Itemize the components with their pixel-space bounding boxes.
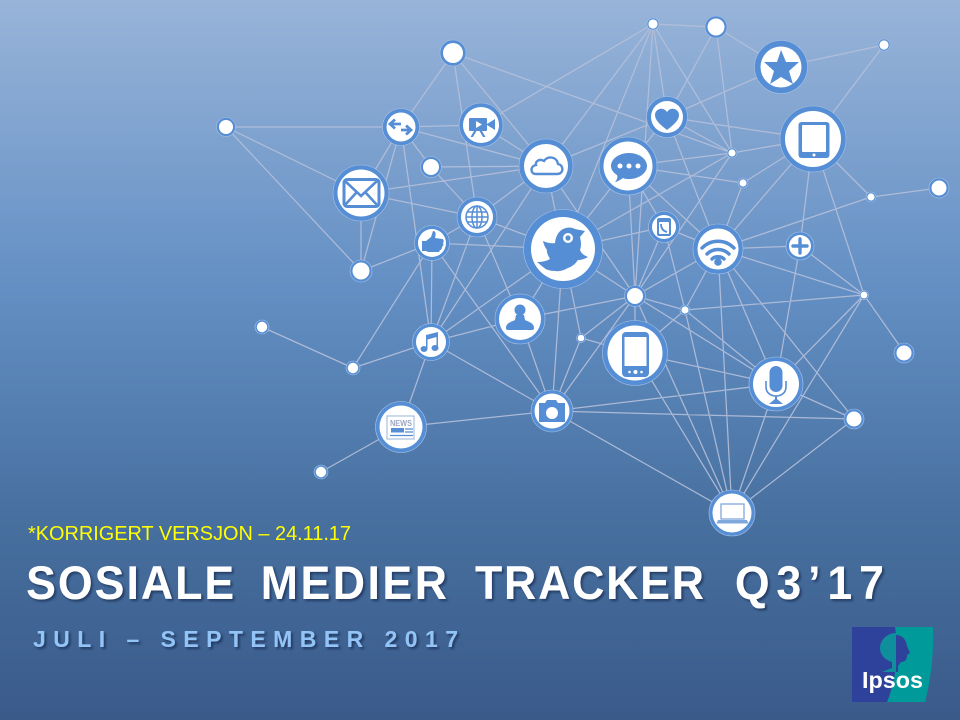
- small node: below arrows: [420, 156, 442, 178]
- icon: smartphone: [602, 320, 668, 386]
- small node: top: [440, 40, 466, 66]
- small node: top centre: [647, 18, 659, 30]
- icon: phone book: [648, 212, 680, 242]
- small node: junction right: [860, 290, 868, 300]
- icon: wifi: [693, 224, 743, 274]
- title: [26, 557, 884, 609]
- icon: cloud: [519, 139, 573, 193]
- icon: microphone: [749, 357, 803, 411]
- icon: thumbs up: [414, 226, 450, 260]
- icon: music note: [412, 324, 450, 360]
- small node: junction right: [866, 192, 876, 202]
- small node: junction: [727, 148, 737, 158]
- small node: centre: [576, 334, 586, 342]
- small node: hub: [624, 286, 646, 306]
- small node: left lower: [346, 361, 360, 375]
- icon: speech bubble: [599, 137, 657, 195]
- icon: plus: [786, 232, 814, 260]
- title: Q3’17: [735, 557, 884, 609]
- icon: laptop: [709, 490, 755, 536]
- small node: far left: [216, 118, 236, 136]
- icon: video camera: [459, 103, 503, 147]
- title: TRACKER: [475, 557, 704, 609]
- network connections: [226, 24, 939, 513]
- icon: newspaper: [376, 402, 426, 452]
- small node: top right: [705, 16, 727, 38]
- icon: globe: [457, 197, 497, 237]
- icon: heart: [646, 96, 688, 138]
- small node: below envelope: [350, 260, 372, 282]
- logo: Ipsos: [852, 627, 933, 702]
- small node: far right: [929, 178, 949, 198]
- title: SOSIALE: [26, 557, 234, 609]
- subtitle: JULI – SEPTEMBER 2017: [33, 626, 458, 652]
- title: MEDIER: [261, 557, 447, 609]
- small node: upper right: [878, 39, 890, 51]
- icon: envelope: [333, 165, 389, 221]
- icon: newspaper: NEWS: [390, 418, 412, 428]
- small node: left: [255, 320, 269, 334]
- small node: lower right: [844, 409, 864, 429]
- small node: bottom left: [314, 465, 328, 479]
- small node: junction: [680, 305, 690, 315]
- icon: person: [495, 294, 545, 344]
- icon: twitter bird: [524, 210, 602, 288]
- small node: right: [894, 343, 914, 363]
- icon: star: [754, 40, 808, 94]
- icon: tablet: [780, 106, 846, 172]
- icon: camera: [531, 390, 573, 432]
- correction note: *KORRIGERT VERSJON – 24.11.17: [28, 523, 351, 545]
- icon: share arrows: [382, 108, 420, 146]
- logo: Ipsos: Ipsos: [862, 667, 923, 693]
- small node: junction: [738, 178, 748, 188]
